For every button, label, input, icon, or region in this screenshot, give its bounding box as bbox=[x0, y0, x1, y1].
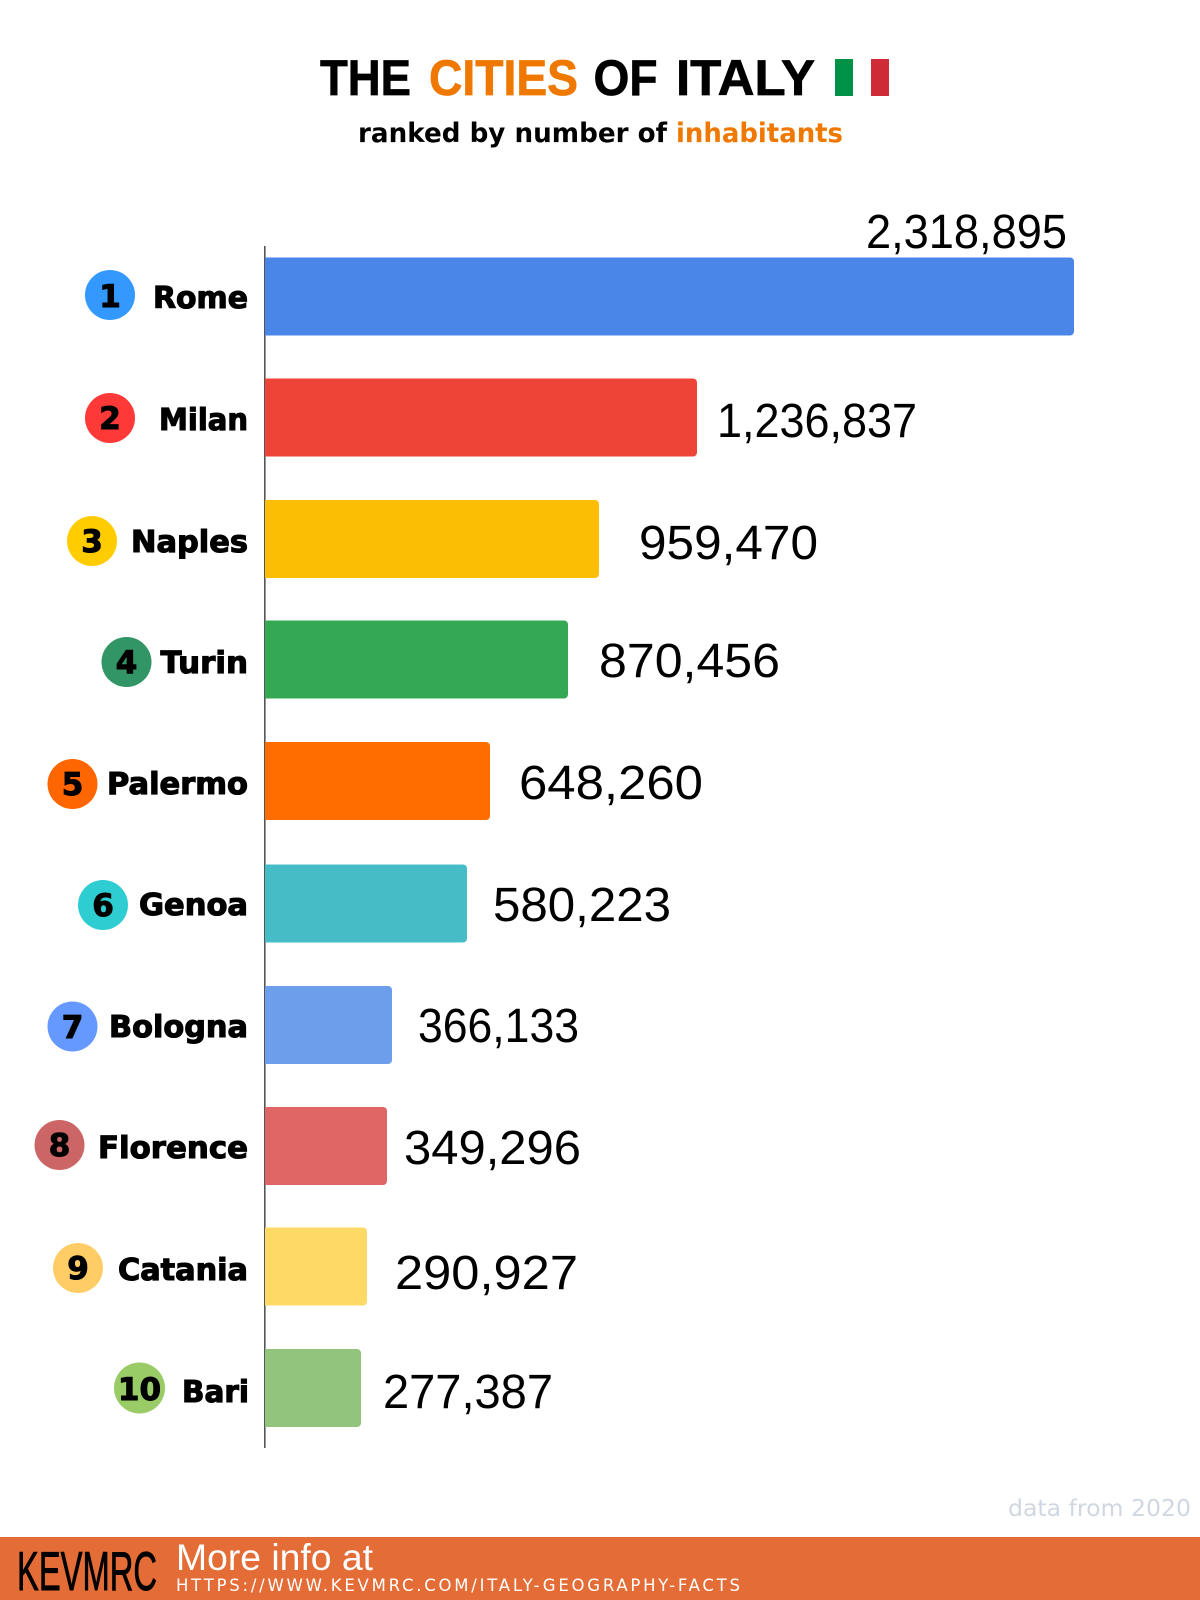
row: Bologna: 7 bbox=[62, 1010, 83, 1046]
row: Bari: 277,387 bbox=[383, 1366, 553, 1419]
footer band bbox=[0, 1537, 1200, 1600]
title bbox=[320, 50, 815, 106]
more info text: More info at bbox=[176, 1537, 374, 1578]
icon: Italian flag bbox=[835, 59, 889, 96]
row: Milan: Milan bbox=[159, 403, 248, 438]
row: Catania bbox=[53, 1228, 578, 1306]
row: Florence: 8 bbox=[49, 1128, 70, 1164]
row: Milan bbox=[85, 378, 917, 456]
row: Genoa bbox=[78, 864, 671, 942]
row: Rome bbox=[85, 206, 1074, 336]
title: CITIES bbox=[429, 50, 578, 106]
row: Rome: 1 bbox=[99, 279, 121, 315]
row: Bari: Bari bbox=[182, 1375, 249, 1410]
title: OF bbox=[594, 50, 658, 106]
row: Genoa: 6 bbox=[92, 888, 114, 924]
row: Milan: 1,236,837 bbox=[717, 395, 917, 448]
row: Florence: 349,296 bbox=[404, 1122, 581, 1175]
row: Milan: 2 bbox=[99, 401, 121, 437]
row: Turin: 870,456 bbox=[599, 635, 780, 688]
row: Bologna bbox=[48, 986, 579, 1064]
row: Palermo bbox=[48, 742, 703, 820]
subtitle: inhabitants bbox=[676, 118, 843, 149]
row: Naples: 3 bbox=[81, 524, 103, 560]
subtitle bbox=[358, 118, 843, 149]
row: Bari bbox=[114, 1349, 553, 1427]
row: Genoa: 580,223 bbox=[493, 879, 671, 932]
title: ITALY bbox=[676, 50, 815, 106]
row: Palermo: Palermo bbox=[107, 767, 248, 802]
row: Rome: Rome bbox=[153, 281, 248, 316]
row: Bologna: 366,133 bbox=[418, 1000, 579, 1053]
chart axis bbox=[264, 246, 266, 1448]
row: Naples: Naples bbox=[131, 525, 248, 560]
row: Florence bbox=[34, 1107, 581, 1185]
row: Turin bbox=[102, 620, 780, 698]
row: Palermo: 5 bbox=[62, 767, 83, 803]
row: Catania: 9 bbox=[67, 1251, 89, 1287]
subtitle: ranked by number of bbox=[358, 118, 667, 149]
row: Catania: 290,927 bbox=[395, 1247, 578, 1300]
row: Catania: Catania bbox=[118, 1253, 248, 1288]
row: Florence: Florence bbox=[98, 1131, 248, 1166]
row: Turin: Turin bbox=[160, 646, 248, 681]
title: THE bbox=[320, 50, 411, 106]
row: Bologna: Bologna bbox=[109, 1010, 248, 1045]
source note: data from 2020 bbox=[1008, 1496, 1191, 1522]
row: Naples bbox=[67, 500, 818, 578]
row: Bari: 10 bbox=[118, 1372, 161, 1408]
row: Rome: 2,318,895 bbox=[866, 206, 1067, 259]
url: HTTPS://WWW.KEVMRC.COM/ITALY-GEOGRAPHY-FACTS bbox=[176, 1576, 740, 1595]
row: Genoa: Genoa bbox=[139, 888, 248, 923]
row: Palermo: 648,260 bbox=[519, 757, 703, 810]
row: Turin: 4 bbox=[116, 645, 137, 681]
row: Naples: 959,470 bbox=[639, 517, 818, 570]
